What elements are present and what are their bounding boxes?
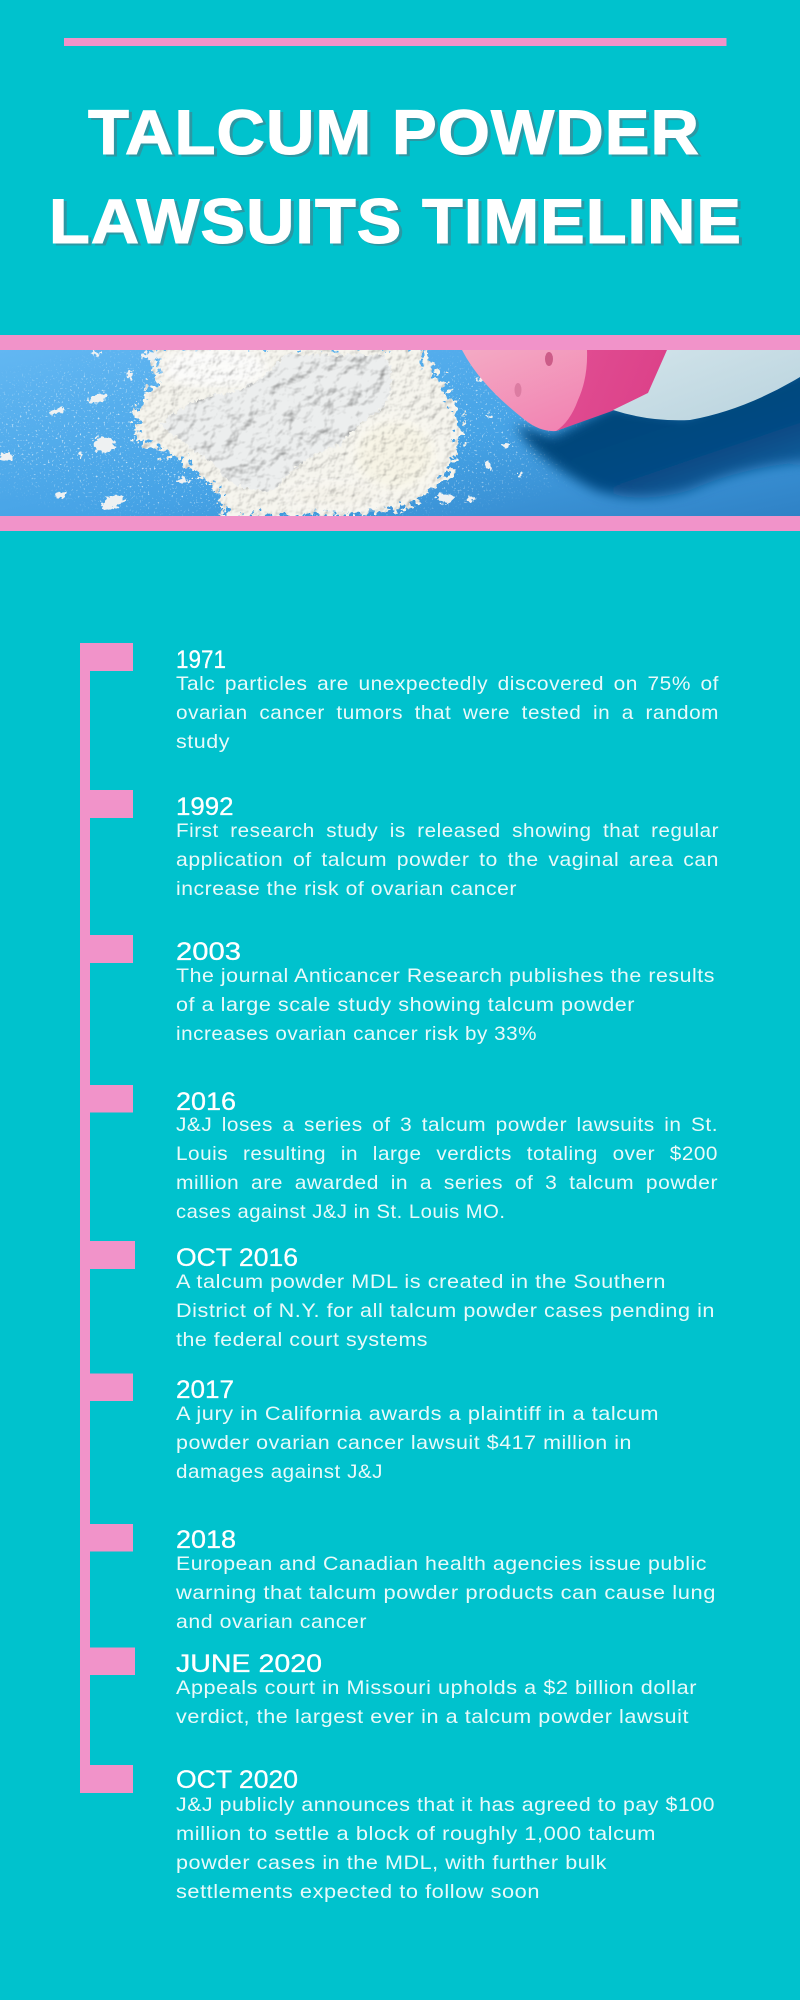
entry: 1971: 1971 <box>176 646 226 674</box>
entry: Oct 2020: powder cases in the MDL, with further bulk <box>176 1852 607 1874</box>
entry: 2016 <box>176 1088 718 1223</box>
entry: Oct 2016: District of N.Y. for all talcum powder cases pending in <box>176 1300 715 1322</box>
entry: Oct 2020: settlements expected to follow soon <box>176 1881 540 1903</box>
entry: 2018: warning that talcum powder products can cause lung <box>175 1582 716 1604</box>
entry: Oct 2016: OCT 2016 <box>176 1244 298 1272</box>
entry: Oct 2016: A talcum powder MDL is created in the Southern <box>176 1271 666 1293</box>
entry: 2018: and ovarian cancer <box>176 1611 367 1633</box>
entry: 2017 <box>176 1376 659 1483</box>
entry: 1992: 1992 <box>176 793 234 821</box>
entry: 2017: powder ovarian cancer lawsuit $417 million in <box>176 1432 632 1454</box>
entry: 2018 <box>175 1526 716 1633</box>
entry: 2017: 2017 <box>176 1376 234 1404</box>
top accent bar <box>64 38 726 46</box>
entry: 2018: 2018 <box>176 1526 236 1554</box>
title: TALCUM POWDER <box>88 98 700 168</box>
entry: 2003: 2003 <box>176 938 241 966</box>
entry: 1992: First research study is released showing that regular <box>176 820 719 842</box>
entry: 2003: The journal Anticancer Research publishes the results <box>176 965 715 987</box>
entry: 2016: cases against J&J in St. Louis MO. <box>176 1201 506 1223</box>
entry: 2016: J&J loses a series of 3 talcum powder lawsuits in St. <box>176 1114 718 1136</box>
entry: Oct 2020: OCT 2020 <box>176 1766 298 1794</box>
title: LAWSUITS TIMELINE <box>49 187 742 257</box>
entry: 2016: million are awarded in a series of 3 talcum powder <box>176 1172 718 1194</box>
entry: 1992: increase the risk of ovarian cancer <box>176 878 517 900</box>
timeline spine with year markers <box>80 643 135 1793</box>
photo banner: talcum powder and bottle <box>0 335 800 531</box>
entry: Oct 2020 <box>176 1766 715 1903</box>
entry: 1992: application of talcum powder to the vaginal area can <box>176 849 719 871</box>
entry: 2017: damages against J&J <box>176 1461 383 1483</box>
entry: 2017: A jury in California awards a plaintiff in a talcum <box>176 1403 659 1425</box>
entry: 2016: Louis resulting in large verdicts totaling over $200 <box>176 1143 718 1165</box>
entry: Oct 2016: the federal court systems <box>176 1329 428 1351</box>
entry: 1971: study <box>176 731 230 753</box>
entry: June 2020: Appeals court in Missouri upholds a $2 billion dollar <box>176 1677 697 1699</box>
entry: Oct 2020: million to settle a block of roughly 1,000 talcum <box>176 1823 656 1845</box>
entry: 2003: of a large scale study showing talcum powder <box>176 994 635 1016</box>
entry: 2003 <box>176 938 715 1045</box>
entry: 2018: European and Canadian health agencies issue public <box>176 1553 707 1575</box>
entry: Oct 2020: J&J publicly announces that it has agreed to pay $100 <box>176 1794 715 1816</box>
entry: 1992 <box>176 793 719 900</box>
entry: 1971: ovarian cancer tumors that were tested in a random <box>176 702 719 724</box>
title <box>49 98 742 257</box>
entry: June 2020 <box>176 1650 697 1728</box>
entry: 2003: increases ovarian cancer risk by 33% <box>176 1023 537 1045</box>
entry: Oct 2016 <box>176 1244 715 1351</box>
entry: 1971 <box>176 646 719 753</box>
entry: 1971: Talc particles are unexpectedly discovered on 75% of <box>176 673 719 695</box>
entry: June 2020: verdict, the largest ever in a talcum powder lawsuit <box>176 1706 689 1728</box>
entry: June 2020: JUNE 2020 <box>176 1650 322 1678</box>
entry: 2016: 2016 <box>176 1088 236 1116</box>
